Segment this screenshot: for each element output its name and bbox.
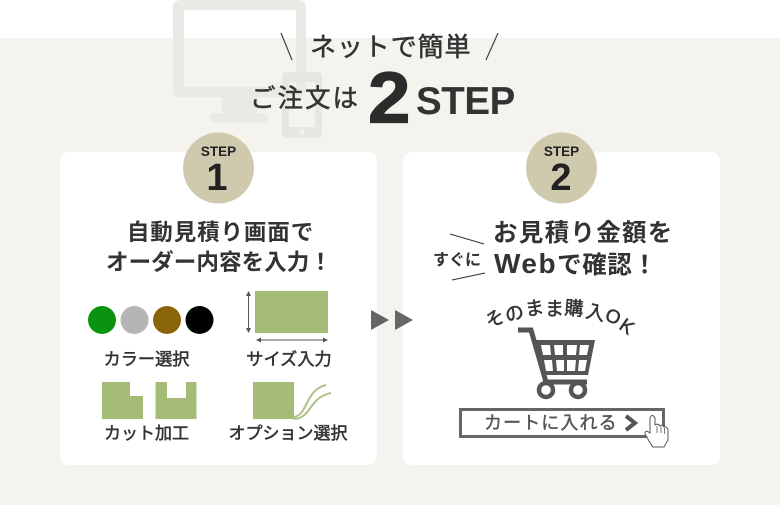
title: 2 [368,57,410,138]
arrows between steps [371,310,413,330]
curved label: buy as-is: ま [524,298,546,321]
curved label: buy as-is: K [615,315,638,340]
label: cut: カット加工 [104,424,189,443]
label: colour: カラー選択 [104,349,189,369]
button: add to cart: カートに入れる [484,413,618,433]
curved label: buy as-is: の [502,301,528,328]
curved label: buy as-is: そ [482,306,509,334]
icon: pointing hand [645,416,668,447]
callout: right away [433,234,485,280]
curved label: buy as-is: O [602,305,623,330]
step 2 heading: お見積り金額を [493,219,674,247]
callout: right away: すぐに [433,251,481,269]
curved label: buy as-is: 入 [584,301,607,326]
step 1 heading: 自動見積り画面で [127,220,314,245]
title [250,32,515,138]
step 1 badge [183,132,254,204]
step 2 badge [526,132,597,204]
curved label: buy as-is [482,297,638,340]
panel: step 1: オーダー内容を入力！ [106,249,332,275]
panel: step 1 [60,132,377,465]
title line 1: ネットで簡単 [310,32,471,62]
icon: size [246,291,328,342]
button: add to cart [460,410,664,436]
curved label: buy as-is: 購 [564,297,584,321]
step 2 badge: 2 [550,157,572,199]
icon: shopping cart [518,330,595,397]
panel: step 2 [403,132,720,465]
curved label: buy as-is: ま [545,299,564,320]
icon: monitor and smartphone watermark [173,0,322,138]
icon: cut shapes [102,382,196,419]
step 2 badge: STEP [544,144,579,159]
label: size: サイズ入力 [246,349,332,369]
icon: colour swatches [88,306,214,334]
title: STEP [416,80,515,123]
step 1 badge: 1 [206,157,228,199]
label: option: オプション選択 [228,424,348,443]
panel: step 2: Webで確認！ [494,248,658,279]
icon: option [253,382,331,419]
title line 2: ご注文は [250,85,360,113]
step 1 badge: STEP [201,144,236,159]
